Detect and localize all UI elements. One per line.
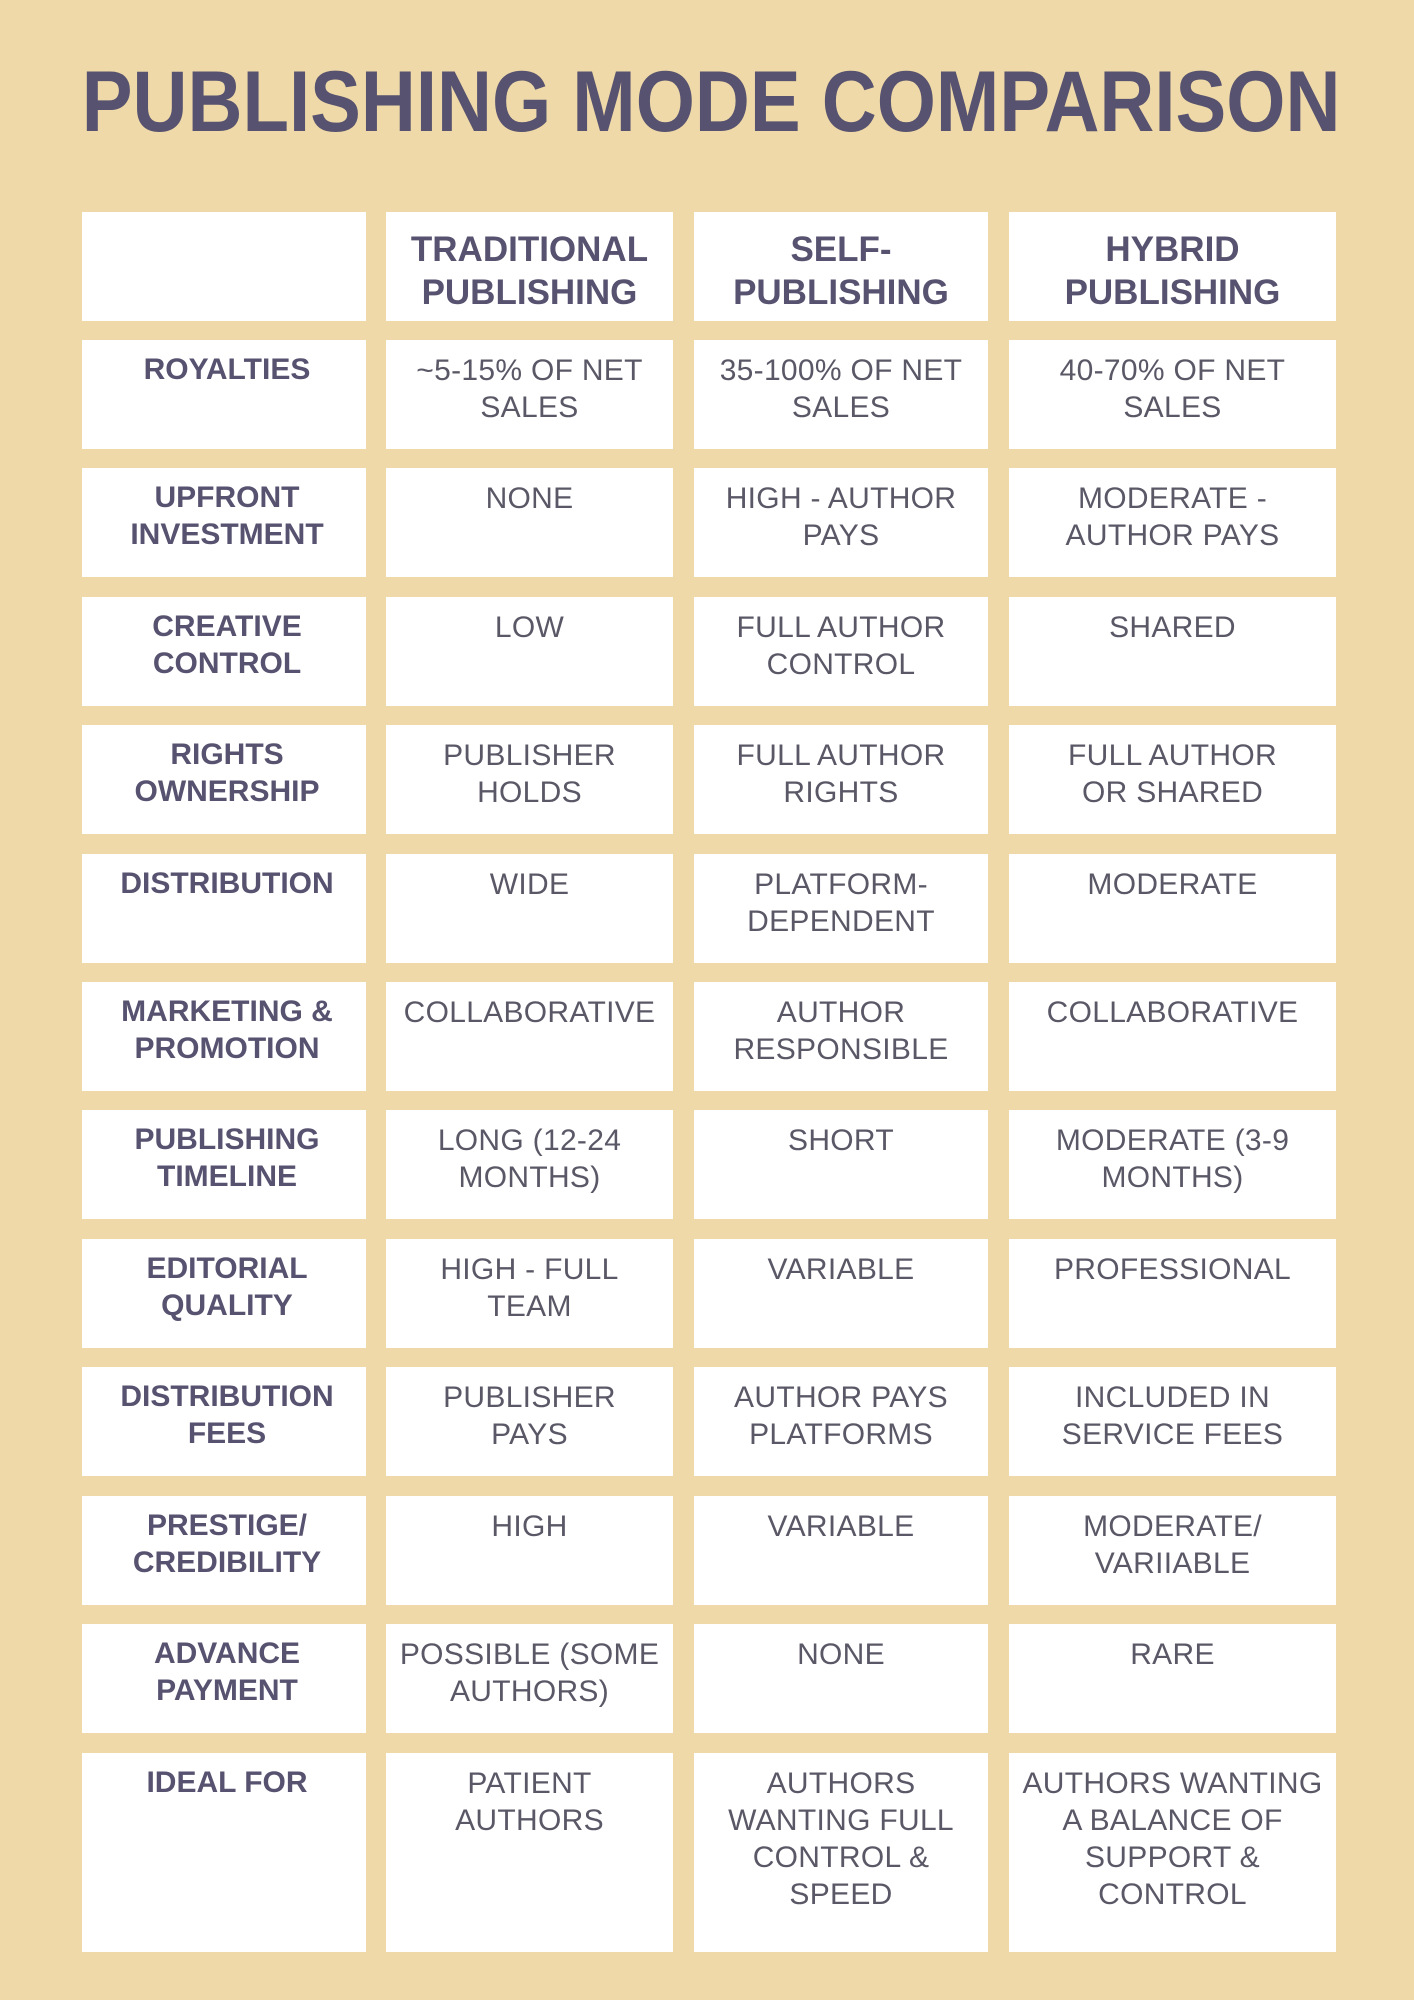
header: traditional: TRADITIONAL bbox=[411, 230, 648, 269]
text: RARE bbox=[1130, 1638, 1215, 1671]
text: OR SHARED bbox=[1082, 776, 1263, 809]
text: MONTHS) bbox=[458, 1161, 601, 1194]
text: MODERATE - bbox=[1078, 482, 1267, 515]
text: PAYS bbox=[803, 519, 879, 552]
text: SALES bbox=[792, 391, 890, 424]
row: royalties bbox=[82, 340, 366, 449]
row: creative control: CREATIVE bbox=[152, 610, 302, 643]
row: prestige: PRESTIGE/ bbox=[147, 1509, 307, 1542]
text: DEPENDENT bbox=[747, 905, 935, 938]
text: A BALANCE OF bbox=[1062, 1804, 1283, 1837]
header: self: PUBLISHING bbox=[733, 273, 949, 312]
row: distribution fees: DISTRIBUTION bbox=[120, 1380, 334, 1413]
text: PUBLISHER bbox=[443, 739, 616, 772]
row: advance payment: ADVANCE bbox=[154, 1637, 300, 1670]
text: SERVICE FEES bbox=[1062, 1418, 1283, 1451]
text: MODERATE (3-9 bbox=[1056, 1124, 1289, 1157]
row: marketing bbox=[82, 982, 366, 1091]
text: 40-70% OF NET bbox=[1060, 354, 1285, 387]
text: COLLABORATIVE bbox=[404, 996, 655, 1029]
text: RIGHTS bbox=[783, 776, 899, 809]
row: prestige bbox=[82, 1496, 366, 1605]
header: traditional bbox=[386, 212, 673, 321]
text: AUTHORS bbox=[767, 1767, 915, 1800]
text: WANTING FULL bbox=[728, 1804, 954, 1837]
text: LOW bbox=[495, 611, 564, 644]
text: PLATFORM- bbox=[754, 868, 928, 901]
row: marketing: MARKETING & bbox=[121, 995, 333, 1028]
row: advance payment bbox=[82, 1624, 366, 1733]
text: HIGH bbox=[491, 1510, 568, 1543]
text: VARIIABLE bbox=[1095, 1547, 1250, 1580]
header: traditional: PUBLISHING bbox=[422, 273, 637, 312]
row: creative control bbox=[82, 597, 366, 706]
text: LONG (12-24 bbox=[438, 1124, 621, 1157]
text: MODERATE bbox=[1087, 868, 1258, 901]
row: distribution: DISTRIBUTION bbox=[120, 867, 334, 900]
text: TEAM bbox=[487, 1290, 572, 1323]
header: self: SELF- bbox=[790, 230, 892, 269]
row: rights ownership: RIGHTS bbox=[170, 738, 284, 771]
text: FULL AUTHOR bbox=[737, 611, 945, 644]
row: ideal for: IDEAL FOR bbox=[146, 1766, 308, 1799]
text: INCLUDED IN bbox=[1075, 1381, 1270, 1414]
text: COLLABORATIVE bbox=[1047, 996, 1298, 1029]
text: AUTHORS) bbox=[450, 1675, 609, 1708]
row: rights ownership: OWNERSHIP bbox=[134, 775, 320, 808]
row: marketing: PROMOTION bbox=[134, 1032, 320, 1065]
text: SALES bbox=[1123, 391, 1222, 424]
text: PLATFORMS bbox=[749, 1418, 933, 1451]
text: VARIABLE bbox=[768, 1510, 914, 1543]
text: HOLDS bbox=[477, 776, 582, 809]
text: PUBLISHER bbox=[443, 1381, 616, 1414]
text: WIDE bbox=[490, 868, 569, 901]
row: ideal for bbox=[82, 1753, 366, 1952]
row: distribution fees bbox=[82, 1367, 366, 1476]
header: self bbox=[694, 212, 988, 321]
text: MONTHS) bbox=[1101, 1161, 1244, 1194]
row: timeline: TIMELINE bbox=[157, 1160, 297, 1193]
header: empty corner bbox=[82, 212, 366, 321]
header: hybrid: PUBLISHING bbox=[1065, 273, 1280, 312]
header: hybrid: HYBRID bbox=[1105, 230, 1240, 269]
text: AUTHORS bbox=[455, 1804, 604, 1837]
row: royalties: ROYALTIES bbox=[144, 353, 310, 386]
row: editorial quality: QUALITY bbox=[161, 1289, 293, 1322]
text: 35-100% OF NET bbox=[720, 354, 962, 387]
text: RESPONSIBLE bbox=[733, 1033, 949, 1066]
text: MODERATE/ bbox=[1083, 1510, 1262, 1543]
text: PATIENT bbox=[467, 1767, 592, 1800]
row: upfront investment bbox=[82, 468, 366, 577]
comparison table bbox=[82, 212, 1336, 1952]
text: POSSIBLE (SOME bbox=[400, 1638, 659, 1671]
row: distribution bbox=[82, 854, 366, 963]
text: AUTHOR bbox=[777, 996, 905, 1029]
row: editorial quality bbox=[82, 1239, 366, 1348]
row: creative control: CONTROL bbox=[153, 647, 301, 680]
row: prestige: CREDIBILITY bbox=[133, 1546, 321, 1579]
text: HIGH - FULL bbox=[440, 1253, 619, 1286]
row: timeline: PUBLISHING bbox=[134, 1123, 320, 1156]
row: advance payment: PAYMENT bbox=[156, 1674, 298, 1707]
row: upfront investment: INVESTMENT bbox=[130, 518, 324, 551]
text: SALES bbox=[480, 391, 579, 424]
text: CONTROL & bbox=[753, 1841, 929, 1874]
text: SHORT bbox=[788, 1124, 894, 1157]
header: hybrid bbox=[1009, 212, 1336, 321]
text: SHARED bbox=[1109, 611, 1236, 644]
text: AUTHORS WANTING bbox=[1022, 1767, 1323, 1800]
row: editorial quality: EDITORIAL bbox=[146, 1252, 308, 1285]
text: SUPPORT & bbox=[1085, 1841, 1260, 1874]
text: CONTROL bbox=[767, 648, 915, 681]
text: VARIABLE bbox=[768, 1253, 914, 1286]
text: FULL AUTHOR bbox=[737, 739, 945, 772]
text: NONE bbox=[797, 1638, 885, 1671]
text: SPEED bbox=[789, 1878, 893, 1911]
text: PROFESSIONAL bbox=[1054, 1253, 1291, 1286]
text: FULL AUTHOR bbox=[1068, 739, 1277, 772]
text: ~5-15% OF NET bbox=[416, 354, 643, 387]
row: timeline bbox=[82, 1110, 366, 1219]
row: upfront investment: UPFRONT bbox=[154, 481, 300, 514]
title: PUBLISHING MODE COMPARISON bbox=[82, 54, 1340, 150]
text: PAYS bbox=[491, 1418, 568, 1451]
text: HIGH - AUTHOR bbox=[726, 482, 956, 515]
text: CONTROL bbox=[1098, 1878, 1247, 1911]
text: AUTHOR PAYS bbox=[734, 1381, 948, 1414]
text: AUTHOR PAYS bbox=[1066, 519, 1279, 552]
row: distribution fees: FEES bbox=[188, 1417, 266, 1450]
row: rights ownership bbox=[82, 725, 366, 834]
text: NONE bbox=[486, 482, 573, 515]
